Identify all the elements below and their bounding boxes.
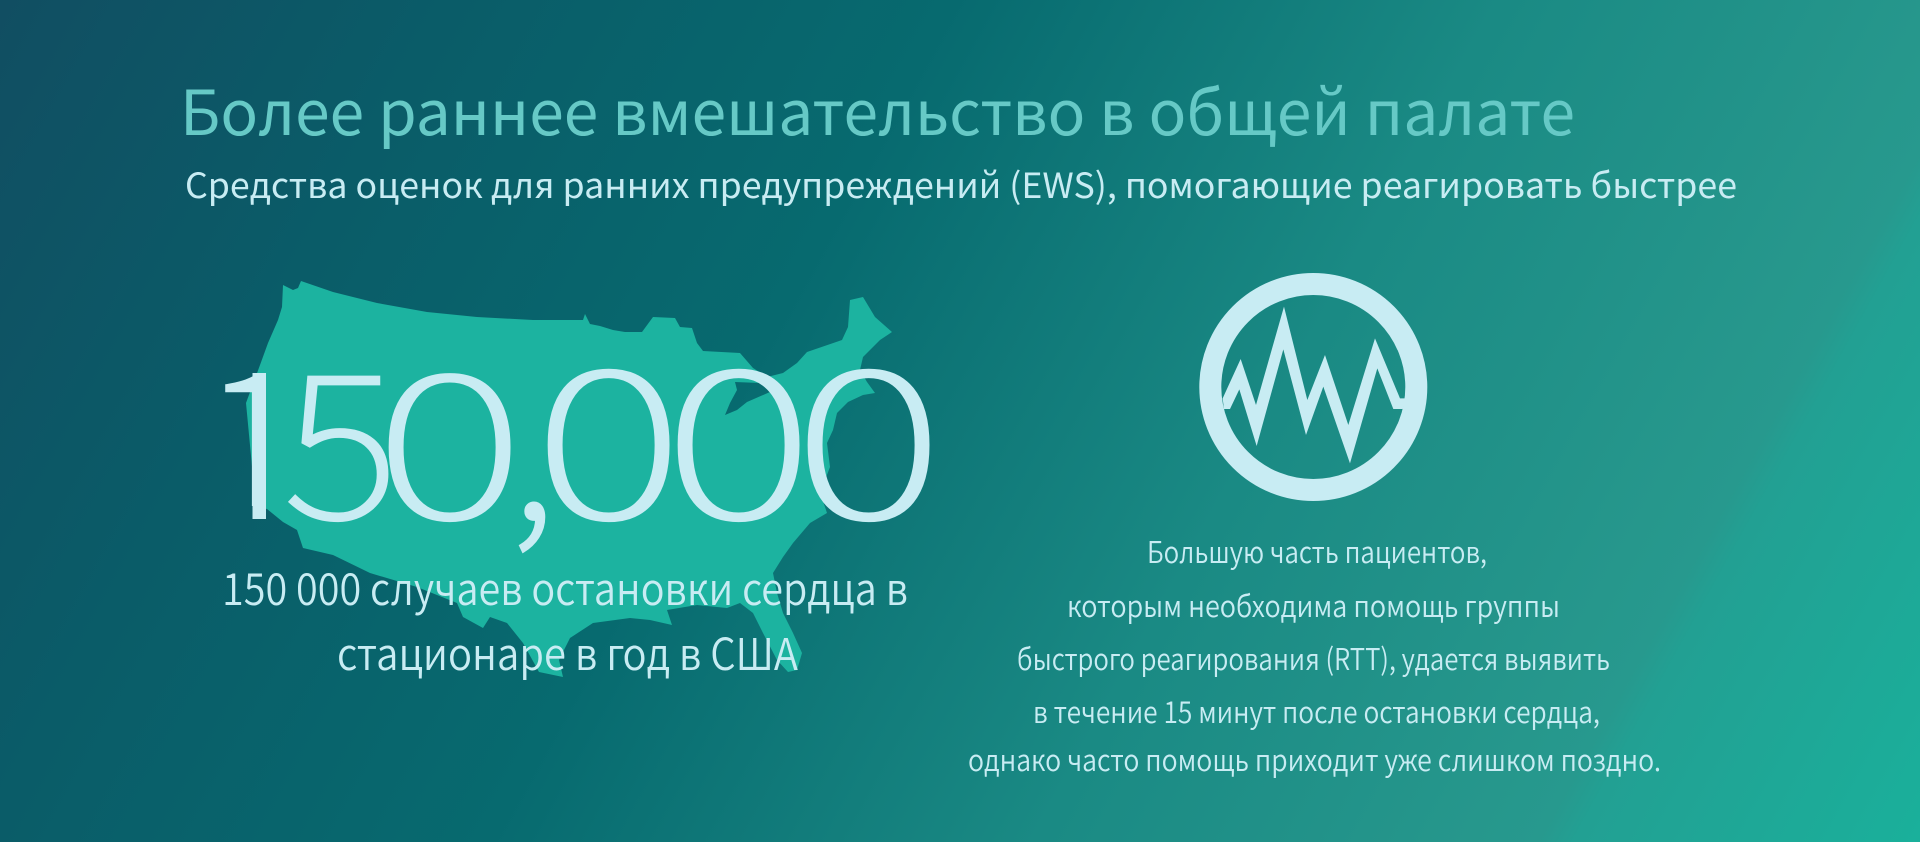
big number: 5 (284, 286, 398, 576)
description text: которым необходима помощь группы (1067, 582, 1560, 626)
subtitle: Средства оценок для ранних предупреждений (EWS), помогающие реагировать быстрее (185, 158, 1737, 209)
caption: cardiac arrests (222, 554, 908, 683)
icon: heartbeat in circle (1210, 284, 1416, 490)
description text: Большую часть пациентов, (1147, 528, 1487, 572)
infographic canvas (186, 84, 1736, 778)
big number (225, 368, 930, 554)
big number: 000 (534, 287, 943, 576)
big number: 1 (198, 287, 308, 577)
big number: 0 (375, 287, 524, 576)
big number: , (510, 286, 556, 576)
caption: cardiac arrests: 150 000 случаев остановки сердца в (222, 554, 908, 618)
description text: быстрого реагирования (RTT), удается выявить (1017, 635, 1610, 679)
caption: cardiac arrests: стационаре в год в США (337, 619, 798, 683)
map: United States silhouette (246, 281, 892, 677)
description text: в течение 15 минут после остановки сердца, (1033, 688, 1600, 732)
title: Более раннее вмешательство в общей палате (180, 63, 1575, 153)
description text (968, 528, 1661, 780)
description text: однако часто помощь приходит уже слишком поздно. (968, 736, 1661, 780)
